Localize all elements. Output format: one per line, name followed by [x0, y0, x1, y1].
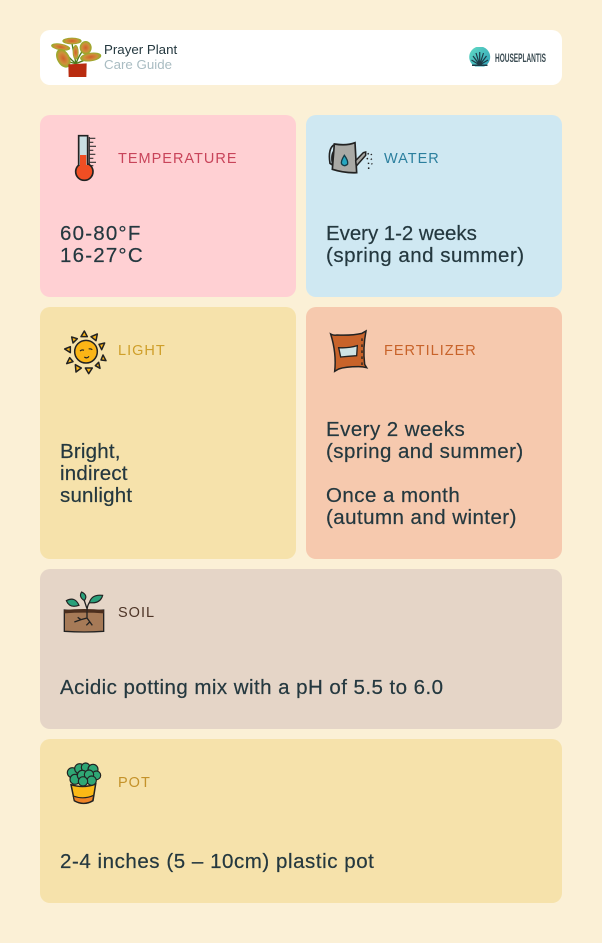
text: fertilizer schedule — [326, 418, 524, 529]
panel: pot — [40, 739, 562, 903]
panel: water — [306, 115, 562, 297]
text: water frequency: Every 1-2 weeks — [326, 222, 477, 245]
label: water: WATER — [384, 151, 440, 167]
label: pot: POT — [118, 775, 151, 791]
panel: light — [40, 307, 296, 559]
icon: potted prayer plant — [51, 38, 102, 77]
title: Prayer Plant Care Guide: Care Guide — [104, 57, 172, 72]
title: Prayer Plant Care Guide: Prayer Plant — [104, 42, 177, 57]
text: light requirement: Bright, — [60, 440, 121, 463]
label: soil: SOIL — [118, 605, 155, 621]
text: light requirement: indirect — [60, 462, 128, 485]
text: fertilizer schedule: Once a month — [326, 484, 460, 507]
icon: watering can — [328, 142, 373, 174]
text: soil requirement: Acidic potting mix with a pH of 5.5 to 6.0 — [60, 676, 444, 699]
logo: Houseplantis — [469, 47, 546, 66]
text: temperature range: 60-80°F — [60, 222, 142, 245]
text: light requirement — [60, 440, 132, 507]
icon: thermometer — [74, 134, 96, 182]
text: fertilizer schedule: (spring and summer) — [326, 440, 524, 463]
text: fertilizer schedule: Every 2 weeks — [326, 418, 465, 441]
label: temperature: TEMPERATURE — [118, 151, 238, 167]
title: Prayer Plant Care Guide — [104, 42, 178, 72]
label: light: LIGHT — [118, 343, 166, 359]
logo: Houseplantis: HOUSEPLANTIS — [495, 51, 546, 65]
label: fertilizer: FERTILIZER — [384, 343, 477, 359]
text: water frequency: (spring and summer) — [326, 244, 525, 267]
icon: fertilizer bag — [329, 330, 368, 373]
icon: potted succulent — [66, 762, 102, 804]
icon: seedling in soil — [64, 591, 104, 633]
header bar — [40, 30, 562, 85]
text: temperature range: 16-27°C — [60, 244, 144, 267]
icon: sun — [64, 330, 107, 374]
text: light requirement: sunlight — [60, 484, 132, 507]
panel: temperature — [40, 115, 296, 297]
text: fertilizer schedule: (autumn and winter) — [326, 506, 517, 529]
text: water frequency — [326, 222, 525, 267]
panel: soil — [40, 569, 562, 729]
text: temperature range — [60, 222, 144, 267]
text: pot recommendation: 2-4 inches (5 – 10cm) plastic pot — [60, 850, 374, 873]
panel: fertilizer — [306, 307, 562, 559]
